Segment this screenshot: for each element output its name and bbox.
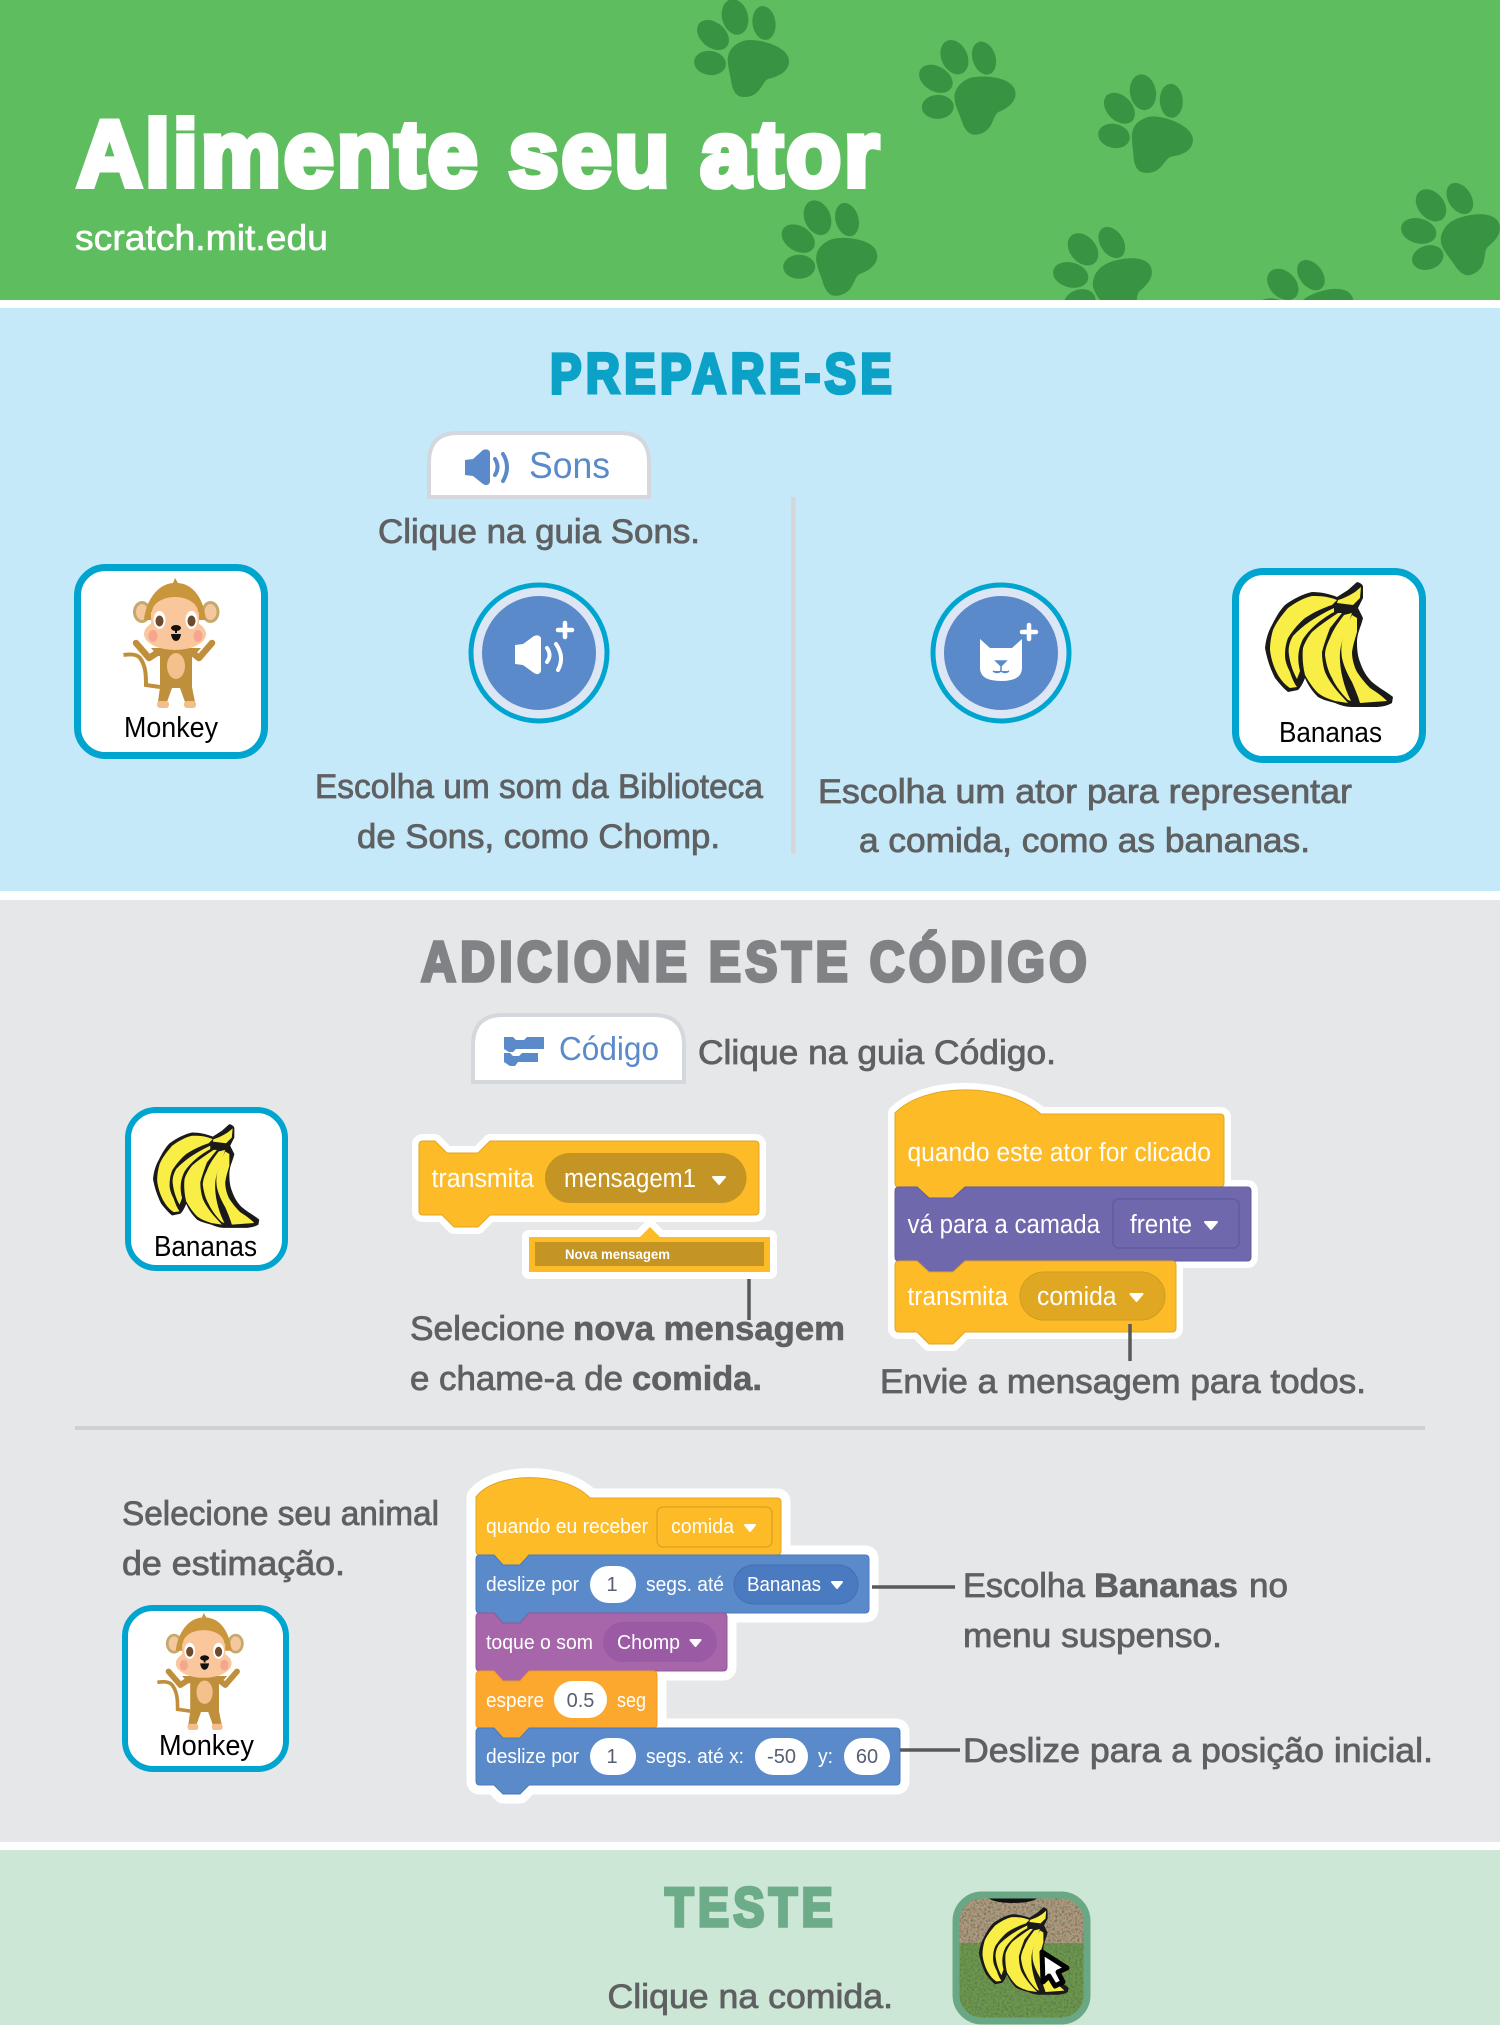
text: clique na comida: Clique na comida. xyxy=(608,1978,893,2016)
text: selecione nova mensagem: Selecione xyxy=(410,1310,565,1348)
block: deslize position: -50 xyxy=(767,1746,796,1768)
block: deslize position xyxy=(476,1728,900,1794)
card: bananas small xyxy=(128,1110,285,1268)
block: toque o som xyxy=(476,1613,727,1681)
tab: sons xyxy=(429,433,649,497)
button: add sprite xyxy=(933,585,1069,721)
title: Alimente seu ator xyxy=(77,101,882,206)
panel: adicione este codigo xyxy=(0,900,1500,1842)
block: espere: seg xyxy=(617,1690,646,1712)
dropdown: nova mensagem: Nova mensagem xyxy=(565,1247,670,1262)
text: escolha um ator: a comida, como as bananas. xyxy=(859,822,1310,860)
text: selecione seu animal xyxy=(122,1495,439,1583)
text: escolha um ator xyxy=(818,773,1352,860)
panel: header xyxy=(0,0,1500,376)
block: deslize bananas xyxy=(476,1555,869,1623)
text: escolha bananas xyxy=(963,1567,1288,1655)
code stack: sprite clicked: transmita xyxy=(908,1283,1009,1311)
icon: banana test thumbnail xyxy=(956,1889,1087,2023)
tab: codigo xyxy=(473,1015,684,1082)
text: escolha bananas: no xyxy=(1249,1567,1288,1605)
code stack: when I receive: quando eu receber xyxy=(486,1516,648,1538)
block: deslize position: deslize por xyxy=(486,1746,579,1768)
text: selecione nova mensagem xyxy=(410,1310,845,1398)
button: add sound xyxy=(471,585,607,721)
text: selecione nova mensagem: comida. xyxy=(632,1360,762,1398)
heading: ADICIONE ESTE CÓDIGO xyxy=(421,930,1091,994)
card: bananas small: Bananas xyxy=(154,1231,257,1263)
block: deslize bananas: segs. até xyxy=(646,1574,724,1596)
heading: TESTE xyxy=(665,1876,837,1938)
block: transmita with dropdown: transmita xyxy=(432,1165,535,1193)
block: deslize bananas: Bananas xyxy=(747,1574,821,1596)
dropdown: nova mensagem xyxy=(529,1227,770,1272)
block: deslize position: 1 xyxy=(606,1746,618,1768)
block: espere: espere xyxy=(486,1690,544,1712)
text: escolha um som xyxy=(315,768,763,856)
block: deslize bananas: 1 xyxy=(606,1574,618,1596)
block: transmita with dropdown: mensagem1 xyxy=(564,1165,696,1193)
text: escolha bananas: Bananas xyxy=(1094,1567,1238,1605)
block: transmita with dropdown xyxy=(419,1141,770,1272)
tab: sons: Sons xyxy=(529,445,610,486)
card: monkey small xyxy=(125,1608,286,1769)
block: deslize position: segs. até x: xyxy=(646,1746,744,1768)
code stack: sprite clicked: quando este ator for clicado xyxy=(908,1139,1211,1167)
code stack: sprite clicked: frente xyxy=(1130,1211,1192,1239)
text: selecione seu animal: Selecione seu animal xyxy=(122,1495,439,1533)
block: toque o som: toque o som xyxy=(486,1632,593,1654)
text: escolha um som: de Sons, como Chomp. xyxy=(357,818,720,856)
text: envie a mensagem: Envie a mensagem para todos. xyxy=(880,1363,1366,1401)
card: bananas xyxy=(1236,572,1422,760)
code stack: sprite clicked: comida xyxy=(1037,1283,1117,1311)
tab: codigo: Código xyxy=(559,1030,659,1067)
block: deslize position: 60 xyxy=(856,1746,878,1768)
card: monkey: Monkey xyxy=(124,712,218,744)
block: deslize position: y: xyxy=(818,1746,833,1768)
text: escolha bananas: menu suspenso. xyxy=(963,1617,1222,1655)
code stack: sprite clicked: vá para a camada xyxy=(908,1211,1101,1239)
text: selecione nova mensagem: nova mensagem xyxy=(573,1310,845,1348)
text: selecione nova mensagem: e chame-a de xyxy=(410,1360,623,1398)
text: selecione seu animal: de estimação. xyxy=(122,1545,345,1583)
text: escolha bananas: Escolha xyxy=(963,1567,1085,1605)
text: deslize para a posicao: Deslize para a posição inicial. xyxy=(963,1732,1433,1770)
panel: teste xyxy=(0,1850,1500,2025)
card: monkey xyxy=(78,568,264,756)
text: escolha um som: Escolha um som da Biblioteca xyxy=(315,768,763,806)
text: escolha um ator: Escolha um ator para representar xyxy=(818,773,1352,811)
block: deslize bananas: deslize por xyxy=(486,1574,579,1596)
code stack: when I receive xyxy=(476,1478,900,1794)
subtitle: scratch.mit.edu xyxy=(75,217,328,258)
heading: PREPARE-SE xyxy=(550,342,896,406)
card: monkey small: Monkey xyxy=(159,1730,254,1762)
text: clique na guia codigo: Clique na guia Código. xyxy=(698,1034,1056,1072)
panel: prepare-se xyxy=(0,308,1500,891)
block: espere: 0.5 xyxy=(567,1690,594,1712)
block: espere xyxy=(476,1671,657,1738)
code stack: sprite clicked xyxy=(895,1090,1251,1344)
paw prints xyxy=(691,0,1500,376)
block: toque o som: Chomp xyxy=(617,1632,680,1654)
card: bananas: Bananas xyxy=(1279,717,1382,749)
code stack: when I receive: comida xyxy=(671,1516,735,1538)
text: clique na guia sons: Clique na guia Sons. xyxy=(378,513,700,551)
